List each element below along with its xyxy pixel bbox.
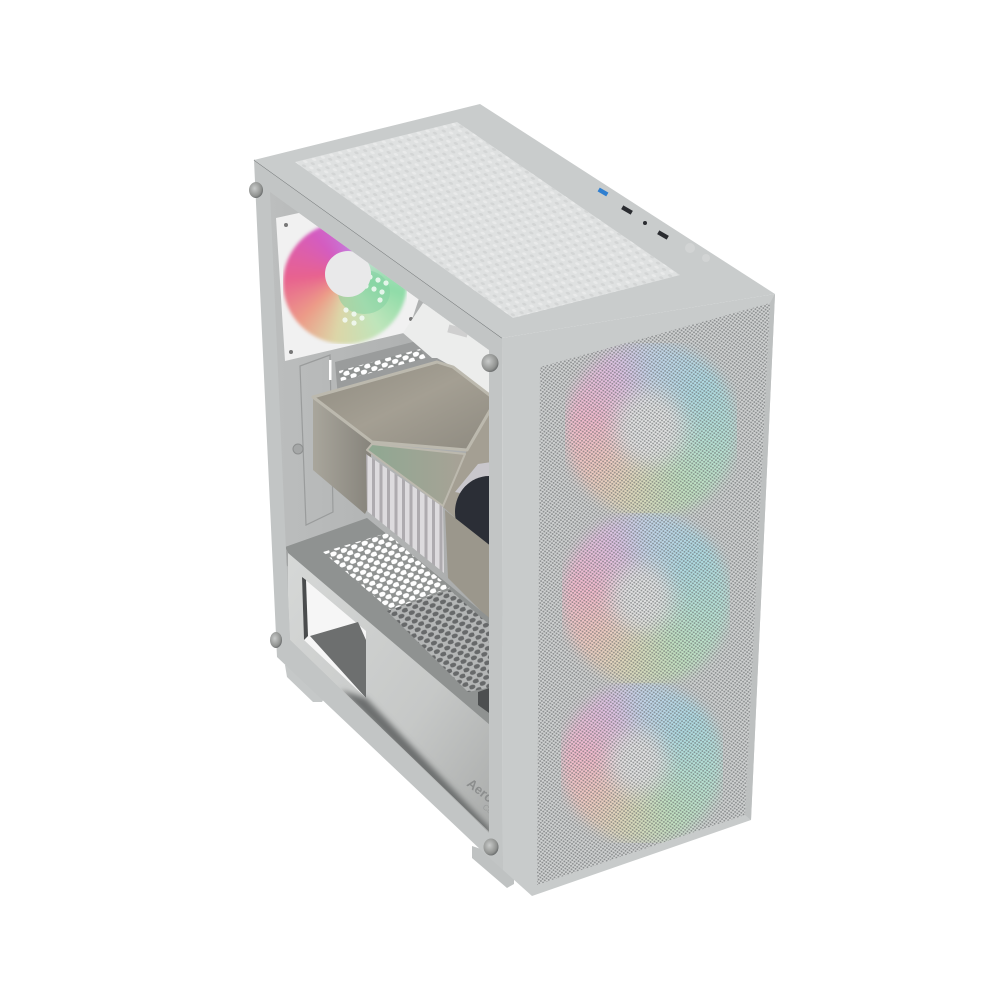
metal tray top xyxy=(313,362,492,450)
shroud front face xyxy=(288,553,489,833)
front fan 2 xyxy=(562,513,730,685)
white drive bracket xyxy=(403,303,489,393)
side frame xyxy=(254,160,503,870)
top panel xyxy=(254,104,775,338)
metal tray lower triangle xyxy=(367,444,465,506)
lower hole strip xyxy=(339,349,426,381)
perforated mesh overlay xyxy=(537,303,770,885)
IO ports xyxy=(598,188,710,262)
right metal box xyxy=(445,510,489,618)
thumbscrews xyxy=(249,182,498,856)
brand text: Aerocool xyxy=(464,776,518,822)
shroud top surface xyxy=(285,518,492,732)
rear RGB fan xyxy=(283,222,407,344)
top mesh xyxy=(295,122,680,318)
vent holes light xyxy=(323,533,450,610)
front fan 3 xyxy=(561,683,723,843)
vent holes dark xyxy=(387,590,492,692)
front fan 1 xyxy=(565,343,737,517)
side opening interior xyxy=(270,192,489,833)
front panel xyxy=(502,290,790,900)
brand text: Cool xyxy=(481,802,499,820)
cooler area behind tray xyxy=(443,416,489,544)
case feet xyxy=(285,665,514,888)
front mesh base xyxy=(537,303,770,885)
fan hub xyxy=(325,251,371,297)
brand text xyxy=(466,780,489,814)
metal tray side xyxy=(313,397,372,514)
rear RGB fan frame xyxy=(276,205,425,361)
product illustration: PC case xyxy=(249,104,775,896)
PSU window xyxy=(302,577,366,698)
rear panel details xyxy=(293,335,450,525)
heatsink fins xyxy=(366,454,444,573)
